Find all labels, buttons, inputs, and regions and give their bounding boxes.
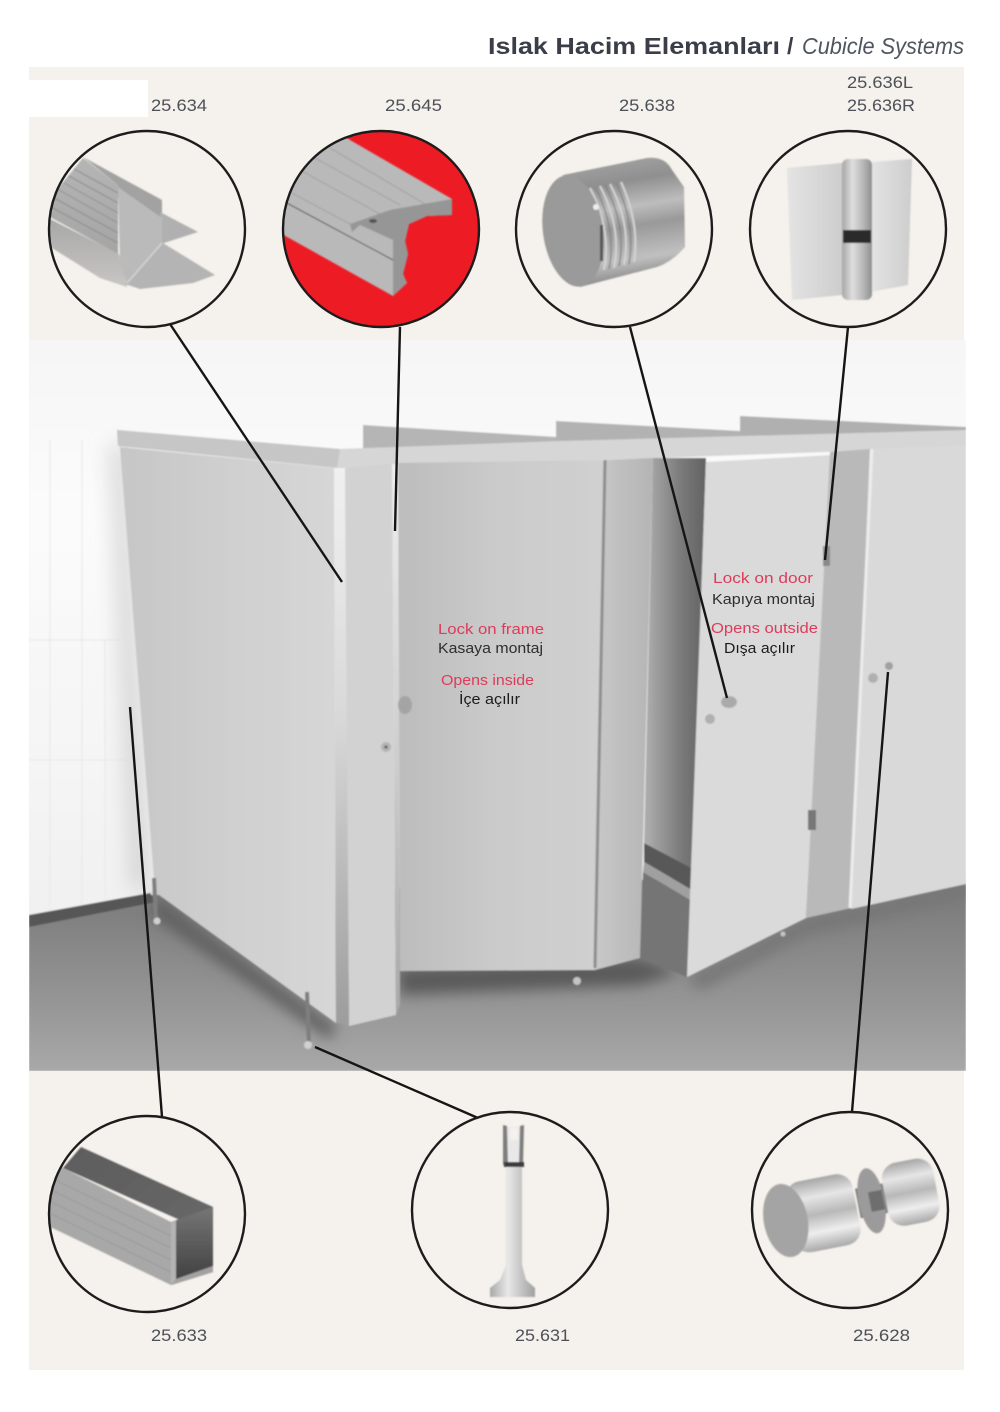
open door bbox=[687, 455, 832, 977]
part numbers 25.636L and 25.636R: 25.636R bbox=[847, 96, 915, 115]
wall shadow beside panel bbox=[112, 445, 148, 892]
note: lock on frame: Kasaya montaj bbox=[438, 640, 543, 657]
back panels bbox=[363, 425, 556, 452]
baseboard bbox=[29, 893, 156, 927]
detail circle: lock knob 25.638 bbox=[516, 131, 712, 327]
part number 25.631: 25.631 bbox=[515, 1326, 570, 1345]
note: lock on door: Opens outside bbox=[711, 620, 818, 637]
part number 25.634: 25.634 bbox=[151, 96, 207, 115]
detail circle: U profile 25.633 bbox=[40, 1116, 245, 1312]
title: Cubicle Systems bbox=[802, 33, 964, 59]
right panel bbox=[851, 445, 966, 909]
detail circle: hinge 25.636 bbox=[750, 131, 946, 327]
wall bbox=[29, 340, 966, 940]
top rail bbox=[336, 430, 966, 468]
wall tile lines bbox=[48, 452, 106, 760]
part number 25.645: 25.645 bbox=[385, 96, 442, 115]
opening bbox=[644, 458, 706, 868]
note: lock on door: Dışa açılır bbox=[724, 640, 795, 657]
note: lock on frame: Opens inside bbox=[441, 672, 534, 689]
part numbers 25.636L and 25.636R bbox=[847, 73, 915, 115]
part number 25.638: 25.638 bbox=[619, 96, 675, 115]
detail circle: door handle 25.628 bbox=[752, 1112, 948, 1308]
second pillar bbox=[595, 458, 653, 970]
title bbox=[488, 33, 964, 59]
floor bbox=[29, 870, 966, 1071]
side panel bbox=[120, 447, 336, 1023]
note: lock on door: Lock on door bbox=[713, 570, 813, 587]
leader lines bbox=[130, 324, 888, 1118]
closed door bbox=[398, 460, 605, 971]
part number 25.628: 25.628 bbox=[853, 1326, 910, 1345]
detail circle: profile 25.645 on red bbox=[282, 130, 480, 328]
part number 25.633: 25.633 bbox=[151, 1326, 207, 1345]
third pillar bbox=[806, 449, 870, 918]
note: lock on door: Kapıya montaj bbox=[712, 591, 815, 608]
detail circle: corner profile 25.634 bbox=[40, 131, 245, 327]
metal strip left bbox=[334, 468, 349, 1026]
feet bbox=[154, 878, 309, 1045]
part numbers 25.636L and 25.636R: 25.636L bbox=[847, 73, 913, 92]
note: lock on frame: Lock on frame bbox=[438, 621, 544, 638]
floor shadows bbox=[150, 885, 966, 1040]
title: / bbox=[787, 33, 794, 59]
title: Islak Hacim Elemanları bbox=[488, 33, 780, 59]
door hardware bbox=[398, 696, 412, 714]
note: lock on frame: İçe açılır bbox=[459, 690, 520, 708]
detail circle: foot post 25.631 bbox=[412, 1112, 608, 1308]
bathroom cubicle scene bbox=[29, 340, 966, 1071]
frame pillar bbox=[344, 464, 396, 1026]
metal strip right bbox=[392, 464, 400, 1015]
note: lock on frame bbox=[438, 621, 544, 708]
note: lock on door bbox=[711, 570, 818, 657]
